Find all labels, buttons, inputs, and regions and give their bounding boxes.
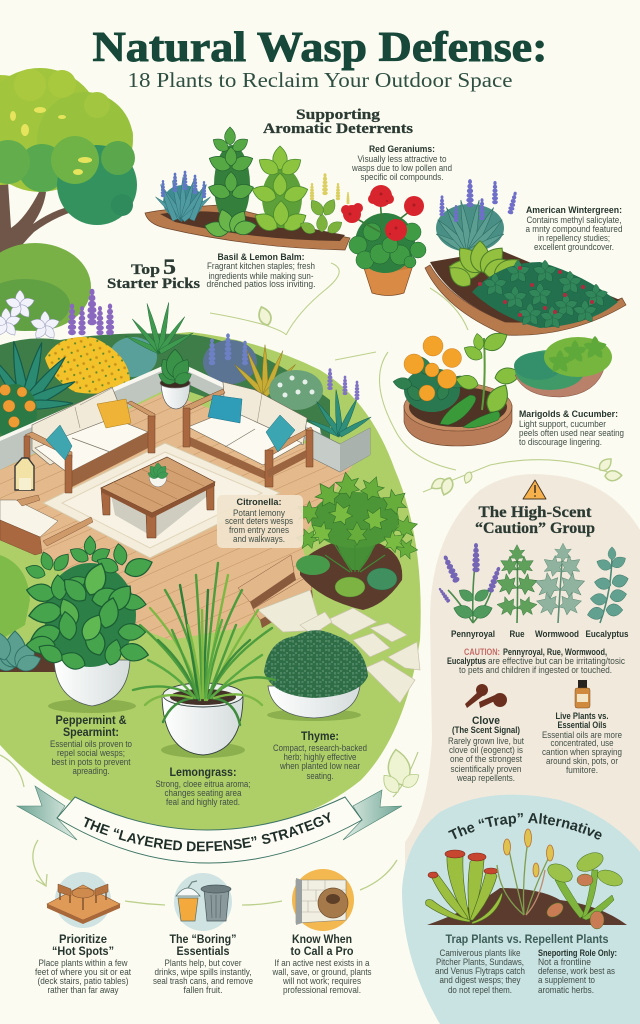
text: citronella: Citronella:: [236, 497, 282, 507]
text: caution note: CAUTION:: [464, 647, 500, 657]
teal pillow: [46, 425, 72, 460]
teal pillow: [208, 395, 242, 423]
text: clove: Rarely grown live, but: [448, 736, 524, 746]
text: prioritize hot spots: “Hot Spots”: [52, 944, 114, 958]
text: marigolds and cucumber: [519, 409, 624, 447]
text: trap plants vs repellent plants: Trap Plants vs. Repellent Plants: [446, 934, 608, 946]
heading: the trap alternative: The “Trap” Alternative: [448, 813, 602, 840]
text: supporting role column: defense, work best as: [538, 966, 615, 976]
text: herb labels: Pennyroyal: [451, 629, 495, 639]
blue herb: [154, 171, 212, 222]
illustration: planter with lavender grass: [306, 368, 372, 472]
illustration: peppermint pot: [24, 536, 155, 713]
yellow pillow: [97, 399, 131, 428]
text: carnivorous plants column: Pitcher Plants, Sundaws,: [436, 957, 524, 967]
text: basil and lemon balm: [206, 252, 316, 289]
text: supporting role column: a supplement to: [538, 975, 595, 985]
illustration: right wintergreen raised bed: [425, 179, 626, 335]
text: trap plants vs repellent plants: [435, 934, 617, 995]
text: prioritize hot spots: Prioritize: [59, 932, 107, 946]
wintergreen groundcover: [472, 260, 618, 330]
text: american wintergreen: in repellency studies;: [538, 233, 610, 243]
text: citronella: and walkways.: [233, 534, 285, 544]
text: supporting role column: Sneporting Role Only:: [538, 948, 617, 958]
text: citronella: Potant lemony: [233, 508, 285, 518]
ribbon tail left: [17, 786, 77, 840]
text: caution note: to pets and children if ingested or touched.: [459, 665, 612, 675]
text: citronella: from entry zones: [229, 525, 289, 535]
icon: nest in wall: [292, 869, 354, 931]
ribbon text: THE “LAYERED DEFENSE” STRATEGY: [84, 812, 330, 852]
pennyroyal: [437, 543, 502, 623]
white flower shrub: [269, 370, 323, 410]
subtitle: 18 Plants to Reclaim Your Outdoor Space: [128, 68, 512, 92]
title: Natural Wasp Defense:: [92, 25, 548, 71]
text: clove: Clove: [472, 715, 500, 727]
text: american wintergreen: Contains methyl salicylate,: [526, 215, 622, 225]
text: know when to call a pro: If an active nest exists in a: [274, 958, 370, 968]
icon: cup and trash can: [174, 873, 232, 931]
table plant: [147, 463, 169, 487]
text: carnivorous plants column: and digest wesps; they: [440, 975, 521, 985]
text: the boring essentials: [153, 932, 253, 995]
illustration: small blue-green plant and lower hedge: [0, 555, 60, 674]
text: american wintergreen: excellent groundcover.: [534, 242, 614, 252]
illustration: carnivorous plants: [426, 829, 627, 929]
illustration: caution herbs: [437, 543, 630, 623]
text: lemongrass: Strong, cloee eitrua aroma;: [156, 779, 250, 789]
sundew: [497, 829, 554, 915]
text: lemongrass: feal and highly rated.: [166, 797, 240, 807]
text: citronella: scent deters wesps: [225, 516, 293, 526]
text: the boring essentials: fallen fruit.: [184, 985, 222, 995]
text: live plants vs essential oils: Live Plants vs.: [556, 711, 608, 721]
illustration: stairs: [238, 555, 313, 628]
spiky agave: [0, 340, 77, 410]
heading: supporting aromatic deterrents: [263, 107, 413, 137]
venus flytrap: [544, 849, 625, 929]
decorative vines: [210, 263, 622, 497]
text: caution note: Eucalyptus: [447, 656, 486, 666]
heading: high-scent caution group: The High-Scent: [478, 504, 592, 521]
illustration: deck: [0, 392, 355, 640]
arrows and connectors: [0, 755, 397, 905]
illustration: right sofa: [183, 382, 313, 487]
text: marigolds and cucumber: to discourage lingering.: [519, 437, 602, 447]
wormwood: [531, 543, 589, 623]
heading: top 5 starter picks: [107, 254, 200, 292]
text: prioritize hot spots: Place plants within a few: [38, 958, 128, 968]
text: basil and lemon balm: Basil & Lemon Balm:: [218, 252, 304, 262]
white flowers: [0, 290, 61, 341]
icon: clove: [465, 684, 507, 708]
text: the boring essentials: Essentials: [176, 944, 230, 958]
text: caution note: Pennyroyal, Rue, Wormwood,: [503, 647, 607, 657]
blue lavender: [203, 333, 257, 384]
text: herb labels: Eucalyptus: [586, 629, 628, 639]
text: herb labels: Wormwood: [535, 629, 579, 639]
text: thyme: herb; highly effective: [284, 752, 356, 762]
panel: trap alternative background: [402, 795, 640, 1024]
tall basil: [203, 127, 258, 239]
text: red geraniums: [351, 144, 452, 182]
callout: citronella label background: [217, 495, 303, 548]
heading: high-scent caution group: “Caution” Group: [475, 520, 595, 537]
text: know when to call a pro: to Call a Pro: [290, 944, 354, 958]
text: the boring essentials: The “Boring”: [170, 932, 236, 946]
illustration: paving stones: [258, 590, 420, 703]
green grass: [124, 302, 194, 354]
illustration: coffee table: [101, 457, 215, 538]
text: clove: one of the strongest: [450, 754, 522, 764]
pitcher plants: [426, 850, 502, 924]
text: know when to call a pro: Know When: [292, 932, 352, 946]
icon: essential oil bottle: [575, 680, 590, 708]
text: clove: clove oil (eogenct) is: [449, 745, 523, 755]
text: carnivorous plants column: and Venus Flytraps catch: [435, 966, 525, 976]
text: clove: scientifically proven: [450, 764, 522, 774]
illustration: red geranium pot: [341, 185, 426, 296]
text: american wintergreen: American Wintergreen:: [526, 205, 622, 215]
illustration: back garden beds: [0, 289, 330, 460]
text: herb labels: [451, 629, 628, 639]
text: live plants vs essential oils: concentrated, use: [550, 738, 614, 748]
illustration: front chair: [0, 495, 93, 555]
text: know when to call a pro: will not work; requires: [282, 976, 361, 986]
ribbon tail right: [343, 790, 402, 840]
heading: high-scent caution group: [475, 504, 595, 537]
text: lemongrass: changes seating area: [164, 788, 242, 798]
text: lemongrass: [156, 767, 250, 807]
panel: lawn: [0, 332, 421, 833]
text: thyme: when planted low near: [279, 761, 360, 771]
lemon balm: [250, 146, 310, 235]
text: clove: [448, 715, 524, 783]
text: live plants vs essential oils: fumitore.: [566, 765, 598, 775]
illustration: lantern: [15, 458, 34, 490]
text: know when to call a pro: professional removal.: [283, 985, 361, 995]
text: prioritize hot spots: (deck stairs, patio tables): [38, 976, 128, 986]
illustration: tree: [0, 68, 137, 320]
text: live plants vs essential oils: [542, 711, 622, 775]
text: know when to call a pro: [272, 932, 372, 995]
text: caution note: [447, 647, 625, 675]
lavender clump: [434, 179, 519, 255]
text: thyme: Compact, research-backed: [273, 743, 367, 753]
text: red geraniums: Red Geraniums:: [369, 144, 435, 154]
text: red geraniums: specific oil compounds.: [360, 172, 444, 182]
illustration: layered defense ribbon: [16, 785, 402, 864]
text: peppermint and spearmint: Peppermint &: [56, 715, 126, 727]
ribbon band: [57, 797, 362, 863]
illustration: raised bed with basil and lemon balm: [145, 127, 350, 250]
icon: patio table: [47, 872, 120, 928]
text: live plants vs essential oils: Essential Oils: [558, 720, 606, 730]
yellow green foliage: [445, 241, 525, 291]
text: supporting role column: aromatic herbs.: [538, 985, 594, 995]
text: prioritize hot spots: [35, 932, 131, 995]
text: american wintergreen: a mnty compound featured: [526, 224, 622, 234]
text: marigolds and cucumber: Marigolds & Cucumber:: [519, 409, 618, 419]
heading: supporting aromatic deterrents: Supporting: [296, 107, 381, 123]
text: lemongrass: Lemongrass:: [170, 767, 236, 779]
text: the boring essentials: Plants help, but cover: [164, 958, 242, 968]
illustration: grey planter walls: [0, 365, 325, 470]
yellow grass: [233, 345, 297, 397]
text: red geraniums: Visually less attractive to: [358, 154, 446, 164]
teal clump: [109, 337, 157, 377]
text: live plants vs essential oils: around skin, pots, or: [546, 756, 618, 766]
yellow flowers: [45, 337, 130, 394]
text: american wintergreen: [526, 205, 622, 252]
text: live plants vs essential oils: cantion when spraying: [542, 747, 622, 757]
text: carnivorous plants column: do not repel them.: [448, 985, 512, 995]
text: thyme: [273, 731, 367, 781]
text: carnivorous plants column: [435, 948, 525, 995]
text: caution note: are effective but can be irritating/tosic: [488, 656, 625, 666]
rue: [493, 545, 541, 623]
teal pillow right: [266, 415, 295, 452]
text: clove: (The Scent Signal): [452, 725, 520, 735]
text: basil and lemon balm: drenched patios loss inviting.: [206, 279, 316, 289]
illustration: potted fern behind sofas: [156, 349, 194, 409]
illustration: sprig on lawn edge: [379, 748, 422, 797]
icon: warning triangle: [523, 480, 546, 499]
text: peppermint and spearmint: apreading.: [72, 766, 110, 776]
heading: top 5 starter picks: Top: [131, 262, 160, 278]
text: clove: weap repellents.: [456, 773, 515, 783]
panel: caution group background: [405, 474, 640, 870]
illustration: left sofa: [24, 387, 155, 493]
illustration: thyme pot: [264, 630, 368, 721]
text: citronella: [225, 497, 293, 544]
orange flowers: [0, 384, 37, 440]
text: thyme: Thyme:: [301, 731, 339, 743]
text: marigolds and cucumber: Light support, cucumber: [519, 419, 606, 429]
illustration: marigolds and cucumber tub: [392, 328, 522, 446]
text: know when to call a pro: wall, save, or ground, plants: [272, 967, 372, 977]
text: basil and lemon balm: ingredients while making sun-: [208, 271, 314, 281]
text: peppermint and spearmint: best in pots to prevent: [52, 757, 131, 767]
illustration: lemongrass pot: [133, 563, 275, 758]
text: the boring essentials: drinks, wipe spills instantly,: [154, 967, 252, 977]
text: herb labels: Rue: [510, 629, 524, 639]
text: prioritize hot spots: feet of where you sit or eat: [35, 967, 131, 977]
eucalyptus: [586, 547, 630, 623]
text: thyme: seating.: [306, 771, 334, 781]
title: [92, 25, 548, 92]
text: supporting role column: [538, 948, 617, 995]
yellow-green plant: [298, 173, 350, 236]
purple lavender: [68, 289, 114, 335]
text: live plants vs essential oils: Essential oils are more: [542, 730, 622, 740]
text: peppermint and spearmint: [50, 715, 132, 776]
heading: top 5 starter picks: Starter Picks: [107, 276, 200, 292]
text: prioritize hot spots: rather than far away: [48, 985, 119, 995]
illustration: citronella shrub with soil bed: [293, 470, 420, 610]
text: basil and lemon balm: Fragrant kitchen staples; fresh: [207, 261, 315, 271]
text: marigolds and cucumber: peels often used near seating: [519, 428, 624, 438]
heading: top 5 starter picks: 5: [163, 254, 176, 279]
text: peppermint and spearmint: repel social wesps;: [57, 748, 125, 758]
illustration: rug: [43, 443, 280, 558]
illustration: hedge: [0, 243, 91, 331]
text: peppermint and spearmint: Essential oils proven to: [50, 739, 132, 749]
heading: supporting aromatic deterrents: Aromatic Deterrents: [263, 121, 413, 137]
text: carnivorous plants column: Camiverous plants like: [440, 948, 520, 958]
text: peppermint and spearmint: Spearmint:: [63, 727, 119, 739]
text: supporting role column: Not a frontline: [538, 957, 591, 967]
text: red geraniums: wasps due to low pollen and: [351, 163, 452, 173]
text: the boring essentials: seal trash cans, and remove: [153, 976, 253, 986]
illustration: small herb tub: [514, 336, 612, 397]
